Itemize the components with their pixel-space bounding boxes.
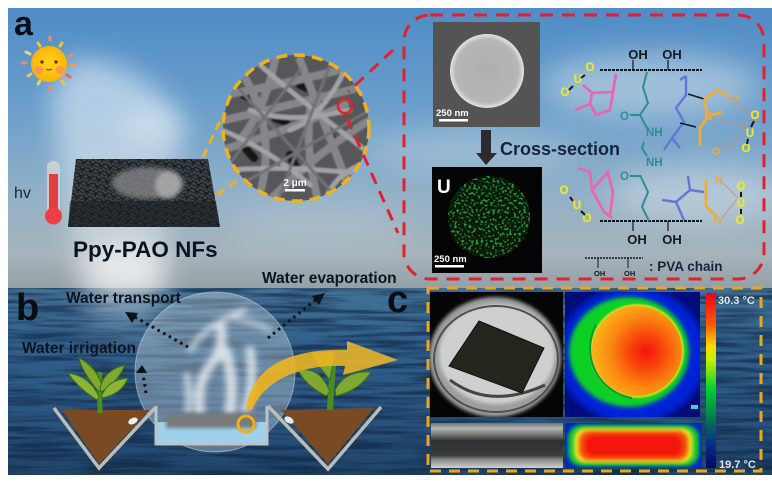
legend: PVA chain: OH [594,269,605,278]
uranyl groups: O [586,62,595,74]
hydroxyl labels: OH [662,47,682,62]
glass dome [135,292,295,452]
uranyl groups: O [742,143,751,155]
scale bar: 2 um: 2 μm [283,178,307,189]
scale bar: 250 nm: 250 nm [436,108,469,119]
chemical structure: O [712,146,721,158]
temperature colour bar [706,293,756,471]
zoom connector: red dashes [347,50,398,233]
hydroxyl labels: OH [627,232,647,247]
panel label a: a [14,5,34,43]
zoom connector: orange dashes [203,117,238,195]
infographic: c [387,279,408,321]
black links [680,94,704,127]
chemical structure: O [730,93,739,105]
red selection circle [338,99,352,113]
blue groups [662,76,704,220]
planter right [268,352,381,469]
legend: PVA chain: : PVA chain [649,259,723,274]
teal linker: NH [646,157,663,169]
orange groups [700,90,750,218]
nanofiber mesh sample [68,159,220,227]
label: water transport: Water transport [66,290,181,307]
chemical structure: O [713,215,722,227]
label: water evaporation: Water evaporation [262,270,397,287]
hydroxyl labels: OH [662,232,682,247]
min temperature: 19.7 °C [719,459,756,471]
side-view thermal image [565,423,702,468]
label: water irrigation: Water irrigation [22,340,136,357]
uranyl groups: O [737,181,746,193]
pink groups [575,74,616,218]
label: cross-section: Cross-section [500,139,620,159]
uranyl groups: O [736,215,745,227]
teal linker: O [620,171,629,183]
elemental map U [432,167,542,273]
uranyl groups: U [574,74,582,86]
plant left [68,358,128,413]
hydroxyl labels [627,47,682,247]
dotted arrow: water irrigation [136,365,147,393]
chemical structure [560,47,760,247]
side-view photograph [431,423,563,468]
label: hv: hv [14,185,31,202]
background: sky [8,8,772,289]
panel: molecular detail frame [404,15,764,279]
dotted arrow: water transport [125,312,188,347]
floating nanofiber sample [166,413,256,428]
uranyl groups: O [583,213,592,225]
top-view thermal image [565,292,700,417]
teal linker: NH [646,127,663,139]
chemical structure: N [704,111,712,123]
labels: panels b and c: b [16,287,39,329]
label: U: U [437,177,451,198]
scale bar: 250 nm: 250 nm [434,254,467,265]
panel c frame [428,288,761,471]
uranyl groups: O [751,110,760,122]
curved yellow arrow [246,341,398,410]
chemical structure: N [715,175,723,187]
top-view photograph [429,292,563,417]
water vapor [187,310,270,412]
teal linker [620,72,663,221]
evaporation container [156,406,267,444]
hydroxyl labels: OH [628,47,648,62]
icon: sun [22,37,75,90]
plant right [298,352,371,410]
max temperature: 30.3 °C [718,295,755,307]
dotted arrow: water evaporation [268,293,325,338]
sample label: Ppy-PAO NFs [73,237,218,262]
teal linker: O [620,111,629,123]
uranyl groups: U [737,198,745,210]
SEM cross-section image [433,22,540,127]
uranyl groups [560,62,760,227]
planter left [54,358,155,468]
legend: PVA chain [585,258,723,278]
background: sea [8,288,772,475]
uranyl groups: U [746,128,754,140]
legend: PVA chain: OH [624,269,635,278]
light beam from sun [50,58,185,350]
icon: thermometer [45,161,62,224]
SEM circle of nanofibers [222,55,372,201]
uranyl groups: U [573,200,581,212]
arrow: down to elemental map [476,130,497,165]
uranyl groups: O [560,185,569,197]
PVA chains [600,60,702,231]
heat spot [238,416,254,432]
uranyl groups: O [561,87,570,99]
